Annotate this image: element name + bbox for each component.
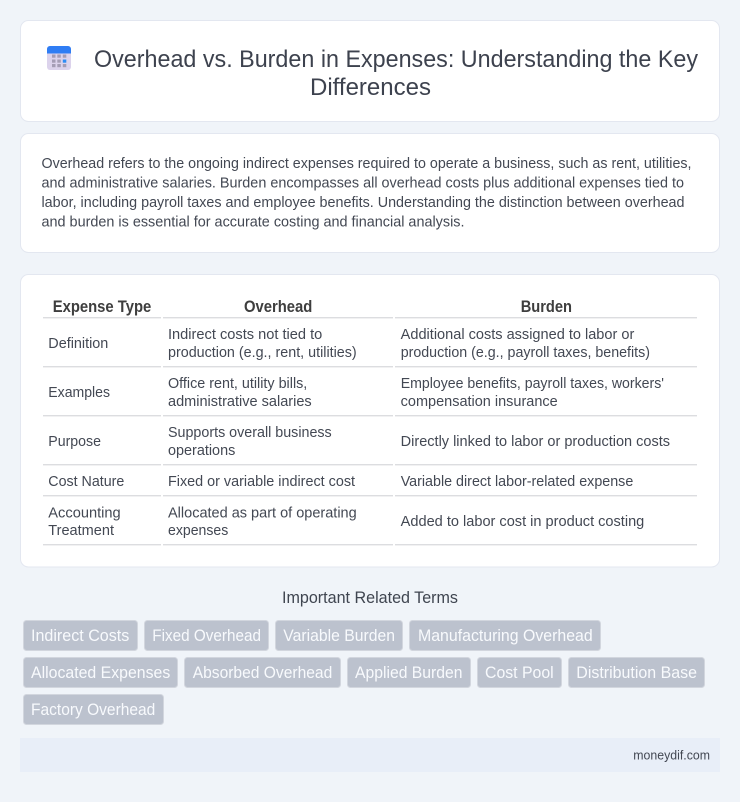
title: Differences <box>310 74 431 101</box>
related term tags: Absorbed Overhead <box>193 664 332 682</box>
table row: definition: production (e.g., payroll taxes, benefits) <box>401 345 650 361</box>
related term tags: Applied Burden <box>355 664 462 682</box>
table row: purpose: operations <box>168 443 235 459</box>
related term tags: Allocated Expenses <box>31 664 170 682</box>
footer: moneydif.com <box>633 747 710 762</box>
table row: cost nature: Fixed or variable indirect cost <box>168 474 355 490</box>
table row: cost nature: Cost Nature <box>48 474 124 490</box>
table row: definition: Indirect costs not tied to <box>168 327 322 343</box>
table row: accounting treatment: Accounting <box>48 505 121 521</box>
table row: definition: Definition <box>48 336 108 352</box>
panel: comparison table <box>20 274 720 567</box>
table row: examples: Examples <box>48 385 110 401</box>
related term tags: Fixed Overhead <box>152 627 261 645</box>
related term tags: Factory Overhead <box>31 701 155 719</box>
table row: purpose: Directly linked to labor or production costs <box>401 434 670 450</box>
table row: cost nature: Variable direct labor-related expense <box>401 474 633 490</box>
related term tags: Cost Pool <box>485 664 554 682</box>
table header: Burden <box>521 298 572 316</box>
panel: header <box>20 20 720 122</box>
heading: important related terms: Important Related Terms <box>282 589 458 607</box>
related term tags: Indirect Costs <box>31 627 129 645</box>
title <box>94 46 699 101</box>
table row: examples: Employee benefits, payroll taxes, workers' <box>401 376 664 392</box>
table row: accounting treatment: expenses <box>168 523 228 539</box>
table row: definition: production (e.g., rent, utilities) <box>168 345 357 361</box>
title: Overhead vs. Burden in Expenses: Understanding the Key <box>94 46 699 73</box>
text block: introduction: Overhead refers to the ongoing indirect expenses required to operate a business, such as rent, utilities, <box>42 156 692 172</box>
table row: examples: Office rent, utility bills, <box>168 376 307 392</box>
text block: introduction: and burden is essential for accurate costing and financial analysis. <box>42 214 464 230</box>
icon: calendar <box>47 46 71 70</box>
table row: definition <box>48 327 650 361</box>
table row: definition: Additional costs assigned to labor or <box>401 327 635 343</box>
related term tags: Manufacturing Overhead <box>418 627 593 645</box>
table row: purpose: Supports overall business <box>168 425 332 441</box>
text block: introduction: labor, including payroll taxes and employee benefits. Understanding the distinction between overhead <box>42 195 684 211</box>
panel: introduction <box>20 134 720 252</box>
table row: accounting treatment: Treatment <box>48 523 114 539</box>
table row: examples: compensation insurance <box>401 394 558 410</box>
related term tags <box>24 620 704 724</box>
table row: cost nature <box>48 474 633 490</box>
table row: examples: administrative salaries <box>168 394 312 410</box>
table row: examples <box>48 376 664 410</box>
table row: accounting treatment <box>48 505 644 539</box>
table row: accounting treatment: Added to labor cost in product costing <box>401 514 644 530</box>
table row: accounting treatment: Allocated as part of operating <box>168 505 357 521</box>
related term tags: Variable Burden <box>283 627 395 645</box>
table header: Overhead <box>244 298 312 316</box>
text block: introduction <box>42 156 692 230</box>
footer <box>20 738 720 772</box>
related term tags: Distribution Base <box>576 664 697 682</box>
table header <box>53 298 572 316</box>
table row: purpose <box>48 425 670 459</box>
text block: introduction: and administrative salaries. Burden encompasses all overhead costs plus additional expenses tied to <box>42 176 684 192</box>
table header: Expense Type <box>53 298 151 316</box>
table row: purpose: Purpose <box>48 434 101 450</box>
